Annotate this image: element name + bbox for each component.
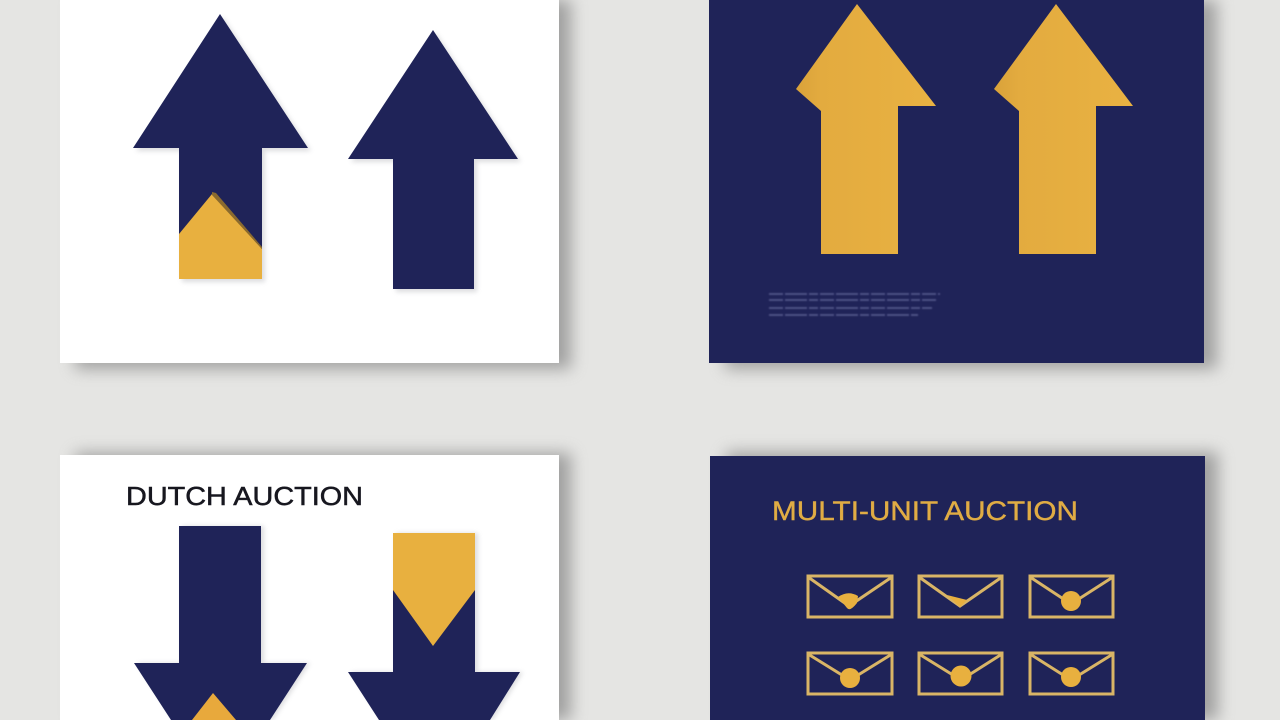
icon: gold up arrow left <box>796 4 936 254</box>
icon: envelope 1 <box>808 576 892 617</box>
panel: top-left ascending arrows <box>60 0 571 369</box>
icon: navy up arrow <box>348 30 521 292</box>
icon: envelope 2 <box>919 576 1002 617</box>
panel: multi-unit auction <box>710 452 1218 720</box>
icon: navy down arrow with gold tip <box>134 526 310 720</box>
panel: Dutch auction <box>60 453 571 720</box>
heading: multi-unit auction: MULTI-UNIT AUCTION <box>772 496 1078 526</box>
icon: navy up arrow with gold tip insert <box>133 14 311 282</box>
text block: illegible fine print <box>769 294 940 315</box>
icon: gold up arrow right <box>994 4 1133 254</box>
icon: envelope 6 <box>1030 653 1113 694</box>
icon: navy down arrow with gold top <box>348 533 523 720</box>
icon: envelope 3 <box>1030 576 1113 617</box>
panel: top-right gold arrows <box>709 0 1217 369</box>
icon: envelope 4 <box>808 653 892 694</box>
heading: Dutch auction: DUTCH AUCTION <box>126 481 363 511</box>
icon: envelope 5 <box>919 653 1002 694</box>
